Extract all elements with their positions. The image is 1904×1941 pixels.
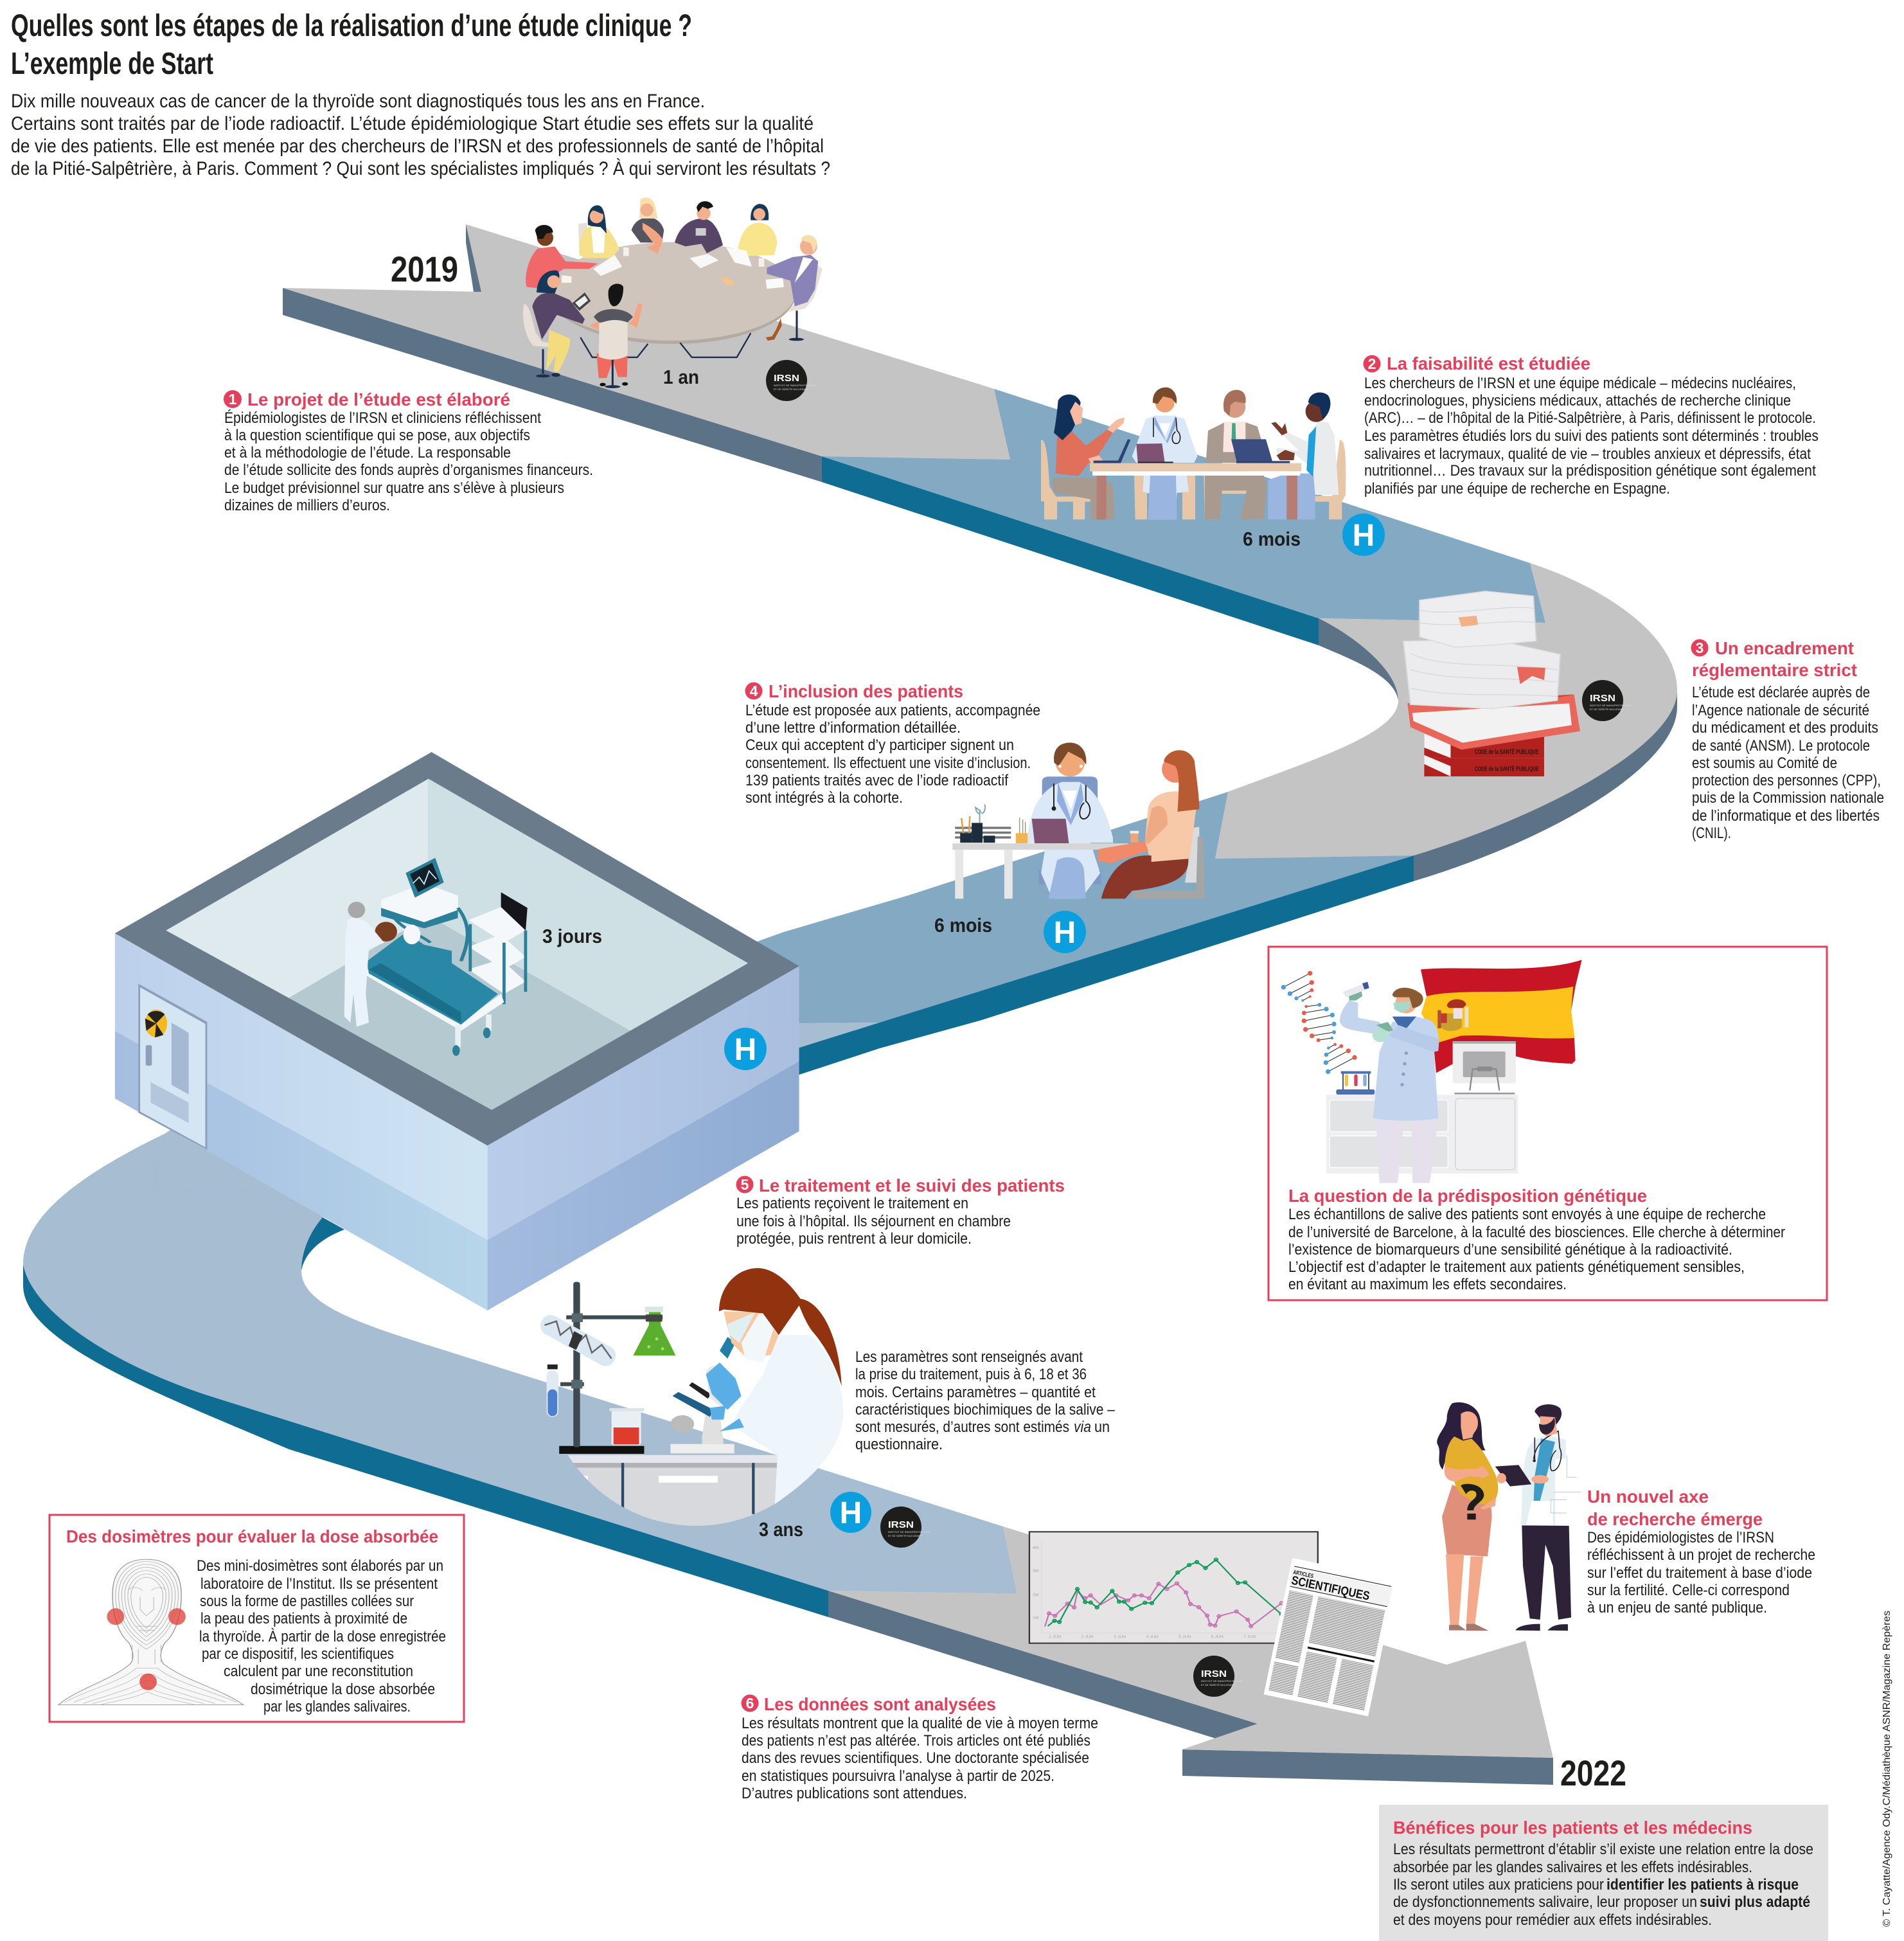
intro text — [11, 91, 830, 179]
chart: line chart: 7 JUN — [1243, 1635, 1256, 1639]
step 2 body: Les chercheurs de l’IRSN et une équipe médicale – médecins nucléaires, — [1364, 375, 1796, 392]
chart: line chart: 6 JUN — [1211, 1635, 1223, 1639]
step 4 body: sont intégrés à la cohorte. — [745, 789, 903, 807]
illustration: paper piles and law books — [1403, 591, 1580, 776]
panel: genetic predisposition — [1268, 947, 1827, 1300]
title — [11, 9, 692, 81]
logo: IRSN 4: ET DE SÛRETÉ NUCLÉAIRE — [1201, 1683, 1235, 1686]
step 2 body: salivaires et lacrymaux, qualité de vie – troubles anxieux et dépressifs, état — [1364, 445, 1811, 463]
illustration: paper piles and law books: CODE de la SANTÉ PUBLIQUE — [1475, 747, 1539, 755]
step 1 body — [224, 409, 593, 514]
logo: IRSN 4: IRSN — [1201, 1668, 1227, 1679]
params text: questionnaire. — [855, 1436, 943, 1453]
params text: sont mesurés, d’autres sont estimés — [855, 1418, 1069, 1436]
params text: un — [1094, 1418, 1110, 1436]
intro text: Certains sont traités par de l’iode radioactif. L’étude épidémiologique Start étudie ses effets sur la qualité — [11, 113, 814, 134]
road: segment 3 gray curve — [1215, 563, 1677, 881]
step 3 body — [1692, 684, 1884, 842]
illustration: pregnant woman and doctor — [1437, 1402, 1581, 1631]
benefits body — [1393, 1841, 1813, 1929]
step 2 body: nutritionnel… Des travaux sur la prédisposition génétique sont également — [1364, 462, 1816, 479]
road: segment 2 blue — [822, 389, 1545, 645]
step 2 number — [1364, 355, 1380, 373]
year 2019: 2019 — [391, 249, 458, 289]
genetics body: l’existence de biomarqueurs d’une sensibilité génétique à la radioactivité. — [1288, 1241, 1732, 1258]
step 3 heading: Un encadrement — [1715, 638, 1854, 658]
step 6 body: dans des revues scientifiques. Une doctorante spécialisée — [742, 1749, 1089, 1767]
step 6 number: 6 — [746, 1695, 754, 1712]
step 3 body: l’Agence nationale de sécurité — [1692, 702, 1869, 719]
icon: hospital H (step 5): H — [840, 1496, 862, 1530]
dosimeters body: sous la forme de pastilles collées sur — [200, 1593, 414, 1610]
step 3 number — [1691, 639, 1708, 657]
step 3 heading — [1692, 638, 1857, 680]
dosimeters body: la thyroïde. À partir de la dose enregistrée — [199, 1628, 446, 1645]
room equipment and patient — [344, 858, 528, 1056]
step 5 body — [736, 1195, 1011, 1248]
genetics heading: La question de la prédisposition génétique — [1288, 1186, 1647, 1206]
step 3 text — [1691, 638, 1884, 842]
new axis heading: Un nouvel axe — [1587, 1487, 1709, 1507]
logo: IRSN 1: IRSN — [774, 373, 799, 384]
illustration: scientist, DNA and Spanish flag — [1281, 960, 1582, 1183]
params text: la prise du traitement, puis à 6, 18 et 36 — [855, 1366, 1087, 1383]
icon: hospital H (step 4): H — [1054, 916, 1076, 950]
genetics body — [1288, 1206, 1785, 1293]
icon: hospital H (step 4) — [1044, 911, 1086, 953]
illustration: medical team at table — [1041, 388, 1346, 519]
step 5 heading: Le traitement et le suivi des patients — [759, 1176, 1065, 1195]
step 4 body: L’étude est proposée aux patients, accompagnée — [745, 702, 1040, 719]
logo: IRSN 2: ET DE SÛRETÉ NUCLÉAIRE — [1590, 708, 1624, 711]
logo: IRSN 1: INSTITUT DE RADIOPROTECTION — [774, 384, 815, 387]
step 4 text — [745, 681, 1040, 807]
chart: line chart: 4 JUN — [1146, 1635, 1159, 1639]
step 5 body: protégée, puis rentrent à leur domicile. — [736, 1230, 972, 1248]
title: Quelles sont les étapes de la réalisation d’une étude clinique ? — [11, 9, 692, 43]
step 6 body: en statistiques poursuivra l’analyse à partir de 2025. — [742, 1767, 1054, 1785]
hospital building — [115, 752, 799, 1310]
logo: IRSN 1: ET DE SÛRETÉ NUCLÉAIRE — [774, 388, 808, 391]
step 2 heading: La faisabilité est étudiée — [1387, 353, 1590, 373]
step 6 body — [742, 1715, 1098, 1802]
step 3 number: 3 — [1696, 640, 1704, 656]
panel: dosimeters — [49, 1515, 464, 1722]
step 4 body: d’une lettre d’information détaillée. — [745, 719, 961, 737]
icon: head with dosimeter spots — [58, 1559, 244, 1705]
icon: hospital H (building) — [724, 1028, 767, 1070]
new axis heading: de recherche émerge — [1587, 1509, 1763, 1529]
benefits body: et des moyens pour remédier aux effets indésirables. — [1393, 1911, 1712, 1929]
dosimeters body: laboratoire de l’Institut. Ils se présentent — [200, 1575, 438, 1593]
genetics body: Les échantillons de salive des patients sont envoyés à une équipe de recherche — [1288, 1206, 1766, 1223]
logo: IRSN 2: INSTITUT DE RADIOPROTECTION — [1590, 704, 1632, 707]
chart: line chart: 3M — [1033, 1569, 1038, 1573]
step 1 body: et à la méthodologie de l’étude. La responsable — [224, 444, 511, 461]
illustration: meeting around a table — [523, 197, 823, 388]
params text — [855, 1348, 1116, 1453]
step 4 body: 139 patients traités avec de l’iode radioactif — [745, 772, 1008, 789]
new axis heading — [1587, 1487, 1763, 1529]
step 3 body: L’étude est déclarée auprès de — [1692, 684, 1870, 701]
new axis body: réfléchissent à un projet de recherche — [1587, 1546, 1815, 1564]
step 3 heading: réglementaire strict — [1692, 660, 1857, 680]
road: segment 5 light blue curve — [23, 1105, 1017, 1617]
logo: IRSN 3: IRSN — [888, 1519, 914, 1530]
logo: IRSN 1 — [766, 360, 815, 401]
chart: line chart: 1M — [1033, 1616, 1038, 1620]
step 1 heading: Le projet de l’étude est élaboré — [247, 389, 510, 409]
icon: hospital H (step 5) — [830, 1492, 871, 1533]
step 2 number: 2 — [1368, 355, 1376, 372]
logo: IRSN 2 — [1582, 680, 1632, 721]
step 1 text — [224, 389, 593, 514]
step 4 number — [745, 683, 762, 699]
title: L’exemple de Start — [11, 47, 213, 81]
step 5 body: Les patients reçoivent le traitement en — [736, 1195, 968, 1212]
step 3 body: (CNIL). — [1692, 825, 1731, 842]
step 6 heading: Les données sont analysées — [764, 1694, 996, 1714]
illustration: doctor with patient — [952, 742, 1205, 899]
logo: IRSN 3: ET DE SÛRETÉ NUCLÉAIRE — [888, 1534, 922, 1537]
chart: line chart: 1 JUN — [1049, 1635, 1062, 1639]
step 2 body: planifiés par une équipe de recherche en Espagne. — [1364, 480, 1670, 497]
step 4 body — [745, 702, 1040, 807]
step 2 text — [1364, 353, 1819, 497]
logo: IRSN 4 — [1193, 1656, 1243, 1697]
illustration: scientific articles journal — [1264, 1558, 1396, 1716]
benefits body: absorbée par les glandes salivaires et les effets indésirables. — [1393, 1859, 1752, 1876]
new axis body — [1587, 1529, 1815, 1616]
dosimeters body: calculent par une reconstitution — [224, 1663, 413, 1680]
road: segment 4 blue — [739, 792, 1414, 1093]
step 3 body: du médicament et des produits — [1692, 719, 1878, 737]
genetics body: en évitant au maximum les effets secondaires. — [1288, 1276, 1567, 1293]
chart: line chart: 3 JUN — [1114, 1635, 1126, 1639]
chart: line chart — [1029, 1532, 1318, 1643]
chart: line chart: 2 JUN — [1081, 1635, 1094, 1639]
chart: line chart: 5 JUN — [1179, 1635, 1191, 1639]
step 2 body: Les paramètres étudiés lors du suivi des patients sont déterminés : troubles — [1364, 427, 1819, 445]
step 3 body: est soumis au Comité de — [1692, 755, 1837, 772]
step 1 number — [224, 390, 242, 408]
genetics body: de l’université de Barcelone, à la faculté des biosciences. Elle cherche à déterminer — [1288, 1224, 1785, 1241]
panel: benefits — [1379, 1805, 1828, 1941]
intro text: de la Pitié-Salpêtrière, à Paris. Comment ? Qui sont les spécialistes impliqués ? À qui serviront les résultats ? — [11, 158, 830, 179]
step 1 body: de l’étude sollicite des fonds auprès d’organismes financeurs. — [224, 461, 593, 479]
step 3 body: de santé (ANSM). Le protocole — [1692, 737, 1870, 755]
icon: hospital H (step 2): H — [1353, 519, 1375, 553]
step 6 body: des patients n’est pas altérée. Trois articles ont été publiés — [742, 1732, 1090, 1749]
step 1 body: Le budget prévisionnel sur quatre ans s’élève à plusieurs — [224, 479, 564, 497]
road: segment 6 gray arrow — [828, 1526, 1553, 1785]
chart: line chart: 4M — [1033, 1546, 1038, 1550]
step 3 body: de l’informatique et des libertés — [1692, 807, 1880, 825]
step 2 body: endocrinologues, physiciens médicaux, attachés de recherche clinique — [1364, 392, 1791, 409]
step 5 number — [736, 1176, 753, 1193]
benefits body: identifier les patients à risque — [1606, 1876, 1799, 1893]
label: 3 ans: 3 ans — [759, 1518, 803, 1541]
step 4 body: Ceux qui acceptent d’y participer signent un — [745, 737, 1014, 754]
step 4 number: 4 — [750, 683, 758, 699]
benefits heading: Bénéfices pour les patients et les médecins — [1393, 1818, 1752, 1838]
new research axis text — [1587, 1487, 1815, 1616]
step 6 number — [742, 1694, 758, 1712]
params text: caractéristiques biochimiques de la salive – — [855, 1401, 1116, 1418]
logo: IRSN 2: IRSN — [1590, 693, 1615, 704]
step 4 body: consentement. Ils effectuent une visite d’inclusion. — [745, 755, 1031, 772]
params text: Les paramètres sont renseignés avant — [855, 1348, 1083, 1366]
step 6 text — [742, 1694, 1098, 1802]
step 1 body: Épidémiologistes de l’IRSN et cliniciens réfléchissent — [224, 409, 541, 427]
dosimeters body: par les glandes salivaires. — [263, 1698, 411, 1715]
illustration: scientific articles journal: ARTICLES — [1293, 1569, 1314, 1579]
dosimeters body: par ce dispositif, les scientifiques — [202, 1645, 394, 1663]
benefits body: suivi plus adapté — [1700, 1893, 1810, 1911]
step 5 number: 5 — [741, 1176, 749, 1193]
step 2 body: (ARC)… – de l’hôpital de la Pitié-Salpêtrière, à Paris, définissent le protocole. — [1364, 409, 1816, 427]
dosimeters body: dosimétrique la dose absorbée — [251, 1681, 435, 1698]
step 5 body: une fois à l’hôpital. Ils séjournent en chambre — [736, 1213, 1011, 1230]
new axis body: Des épidémiologistes de l’IRSN — [1587, 1529, 1774, 1546]
step 2 body — [1364, 375, 1819, 497]
logo: IRSN 3 — [880, 1507, 930, 1548]
params text: via — [1074, 1418, 1091, 1436]
step 1 body: à la question scientifique qui se pose, aux objectifs — [224, 427, 530, 444]
intro text: Dix mille nouveaux cas de cancer de la thyroïde sont diagnostiqués tous les ans en France. — [11, 91, 705, 112]
dosimeters body: la peau des patients à proximité de — [200, 1610, 407, 1627]
icon: hospital H (step 2) — [1342, 514, 1385, 556]
dosimeters body — [197, 1557, 446, 1715]
illustration: paper piles and law books: CODE de la SANTÉ PUBLIQUE — [1475, 765, 1539, 773]
benefits body: de dysfonctionnements salivaire, leur proposer un — [1393, 1893, 1697, 1911]
label: 6 mois (step 4): 6 mois — [934, 914, 992, 936]
genetics body: L’objectif est d’adapter le traitement aux patients génétiquement sensibles, — [1288, 1258, 1745, 1276]
logo: IRSN 3: INSTITUT DE RADIOPROTECTION — [888, 1530, 930, 1534]
benefits body: Ils seront utiles aux praticiens pour — [1393, 1876, 1604, 1893]
year 2022: 2022 — [1560, 1753, 1626, 1793]
icon: hospital H (building): H — [734, 1033, 756, 1067]
step 4 heading: L’inclusion des patients — [769, 681, 963, 701]
new axis body: sur l’effet du traitement à base d’iode — [1587, 1564, 1812, 1582]
credit: © T. Cayatte/Agence Ody.C/Médiathèque ASNR/Magazine Repères — [1882, 1611, 1892, 1927]
label: 6 mois (step 2): 6 mois — [1243, 528, 1301, 550]
road: segment 1 gray — [283, 224, 1010, 482]
new axis body: à un enjeu de santé publique. — [1587, 1599, 1767, 1616]
illustration: scientific articles journal: SCIENTIFIQUES — [1290, 1574, 1371, 1604]
chart: line chart: 2M — [1033, 1593, 1038, 1597]
dosimeters body: Des mini-dosimètres sont élaborés par un — [197, 1557, 443, 1575]
logo: IRSN 4: INSTITUT DE RADIOPROTECTION — [1201, 1679, 1243, 1683]
new axis body: sur la fertilité. Celle-ci correspond — [1587, 1582, 1790, 1599]
step 6 body: D’autres publications sont attendues. — [742, 1785, 967, 1802]
step 1 number: 1 — [229, 391, 237, 407]
dosimeters heading: Des dosimètres pour évaluer la dose absorbée — [66, 1526, 438, 1546]
step 6 body: Les résultats montrent que la qualité de vie à moyen terme — [742, 1715, 1098, 1732]
label: 1 an: 1 an — [663, 366, 699, 388]
door with radiation sign — [138, 984, 207, 1150]
label: 3 jours: 3 jours — [542, 925, 602, 947]
benefits body: Les résultats permettront d’établir s’il existe une relation entre la dose — [1393, 1841, 1813, 1858]
step 5 text — [736, 1176, 1065, 1248]
params text: mois. Certains paramètres – quantité et — [855, 1384, 1096, 1401]
illustration: researcher at microscope — [537, 1268, 843, 1530]
step 1 body: dizaines de milliers d’euros. — [224, 497, 390, 514]
intro text: de vie des patients. Elle est menée par des chercheurs de l’IRSN et des professionnels de santé de l’hôpital — [11, 136, 824, 157]
